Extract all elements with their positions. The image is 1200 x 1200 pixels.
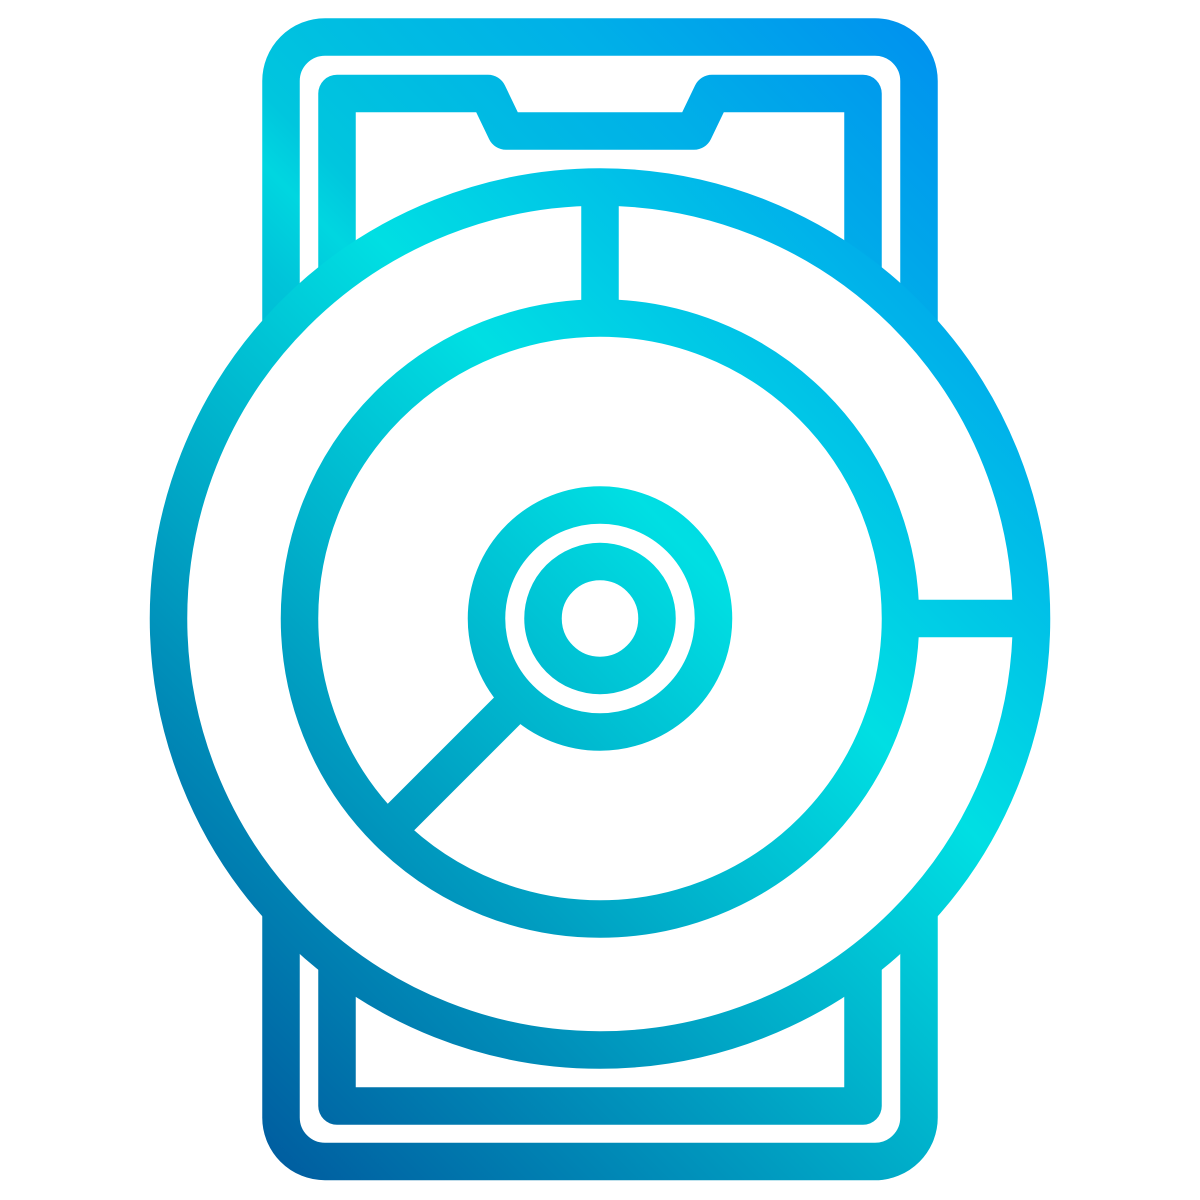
center pivot ring: [543, 562, 657, 676]
bottom strap inner outline: [337, 840, 863, 1106]
watch case ring: [168, 187, 1032, 1050]
dial ring: [300, 318, 900, 919]
center hub ring: [486, 505, 714, 732]
top strap inner outline with notch: [337, 94, 863, 400]
right spoke: [900, 600, 1020, 637]
top strap outer outline: [281, 37, 919, 400]
top spoke: [581, 200, 619, 320]
bottom strap outer outline: [281, 840, 919, 1162]
diagonal watch hand: [395, 703, 515, 823]
